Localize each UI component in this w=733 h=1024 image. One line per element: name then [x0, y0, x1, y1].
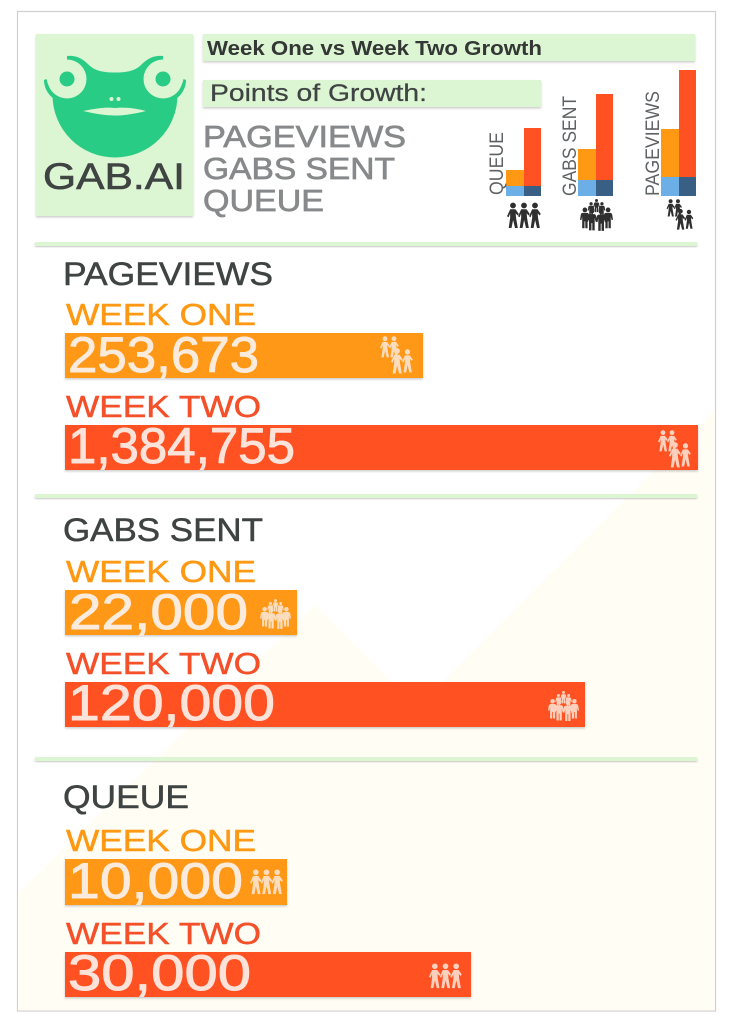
heading: gabs sent: GABS SENT: [63, 512, 263, 548]
bar: week two 1,384,755: 1,384,755: [68, 418, 295, 474]
divider: [35, 494, 697, 498]
header panel: [36, 34, 696, 231]
icon: three walkers: [250, 869, 283, 894]
mini chart: pageviews: PAGEVIEWS: [643, 91, 664, 196]
list of growth points: PAGEVIEWS: [203, 119, 406, 154]
divider: [35, 757, 697, 761]
icon: walkers: [658, 430, 691, 468]
points of growth banner: Points of Growth:: [210, 80, 427, 107]
icon: walkers group: [667, 199, 693, 230]
title banner: Week One vs Week Two Growth: [207, 38, 542, 60]
background rising arrow shape: [18, 410, 715, 1010]
points of growth banner: [203, 80, 541, 107]
label: week one: WEEK ONE: [66, 823, 256, 858]
icon: crowd: [260, 599, 291, 629]
logo panel: [36, 34, 193, 216]
label: week two: WEEK TWO: [66, 646, 261, 681]
bar: week one 22,000: 22,000: [69, 584, 248, 640]
list of growth points: [203, 119, 406, 218]
panel: queue: [63, 779, 471, 1001]
panel: gabs sent: [63, 512, 585, 731]
bar: week two 30,000: [65, 945, 471, 1001]
mini chart: queue: [487, 128, 541, 228]
icon: walkers: [380, 336, 413, 374]
bar: week two 120,000: 120,000: [68, 675, 275, 731]
label: week one: WEEK ONE: [66, 554, 256, 589]
bar: week two 1,384,755: [65, 418, 698, 474]
bar: week one 10,000: [65, 853, 287, 909]
icon: crowd: [580, 199, 613, 231]
bar: week one 10,000: 10,000: [68, 853, 243, 909]
bar: week two 30,000: 30,000: [68, 945, 251, 1001]
mini chart: queue: QUEUE: [487, 132, 508, 195]
list of growth points: GABS SENT: [203, 151, 395, 186]
icon: green frog: [44, 56, 186, 157]
label: week two: WEEK TWO: [66, 916, 261, 951]
label: week two: WEEK TWO: [66, 389, 261, 424]
bar: week one 253,673: [65, 327, 423, 383]
logo wordmark: GAB.AI: [43, 156, 185, 197]
heading: pageviews: PAGEVIEWS: [63, 256, 273, 292]
divider: [35, 242, 697, 246]
icon: three walkers: [507, 203, 541, 228]
title banner: [203, 34, 695, 61]
icon: three walkers: [429, 963, 462, 988]
bar: week two 120,000: [65, 675, 585, 731]
mini chart: pageviews: [643, 70, 696, 230]
mini chart: gabs sent: [560, 94, 613, 231]
heading: queue: QUEUE: [63, 779, 189, 815]
list of growth points: QUEUE: [203, 183, 324, 218]
label: week one: WEEK ONE: [66, 297, 256, 332]
icon: crowd: [548, 691, 579, 721]
panel: pageviews: [63, 256, 698, 474]
mini chart: gabs sent: GABS SENT: [560, 96, 581, 196]
bar: week one 22,000: [65, 584, 297, 640]
bar: week one 253,673: 253,673: [68, 327, 259, 383]
